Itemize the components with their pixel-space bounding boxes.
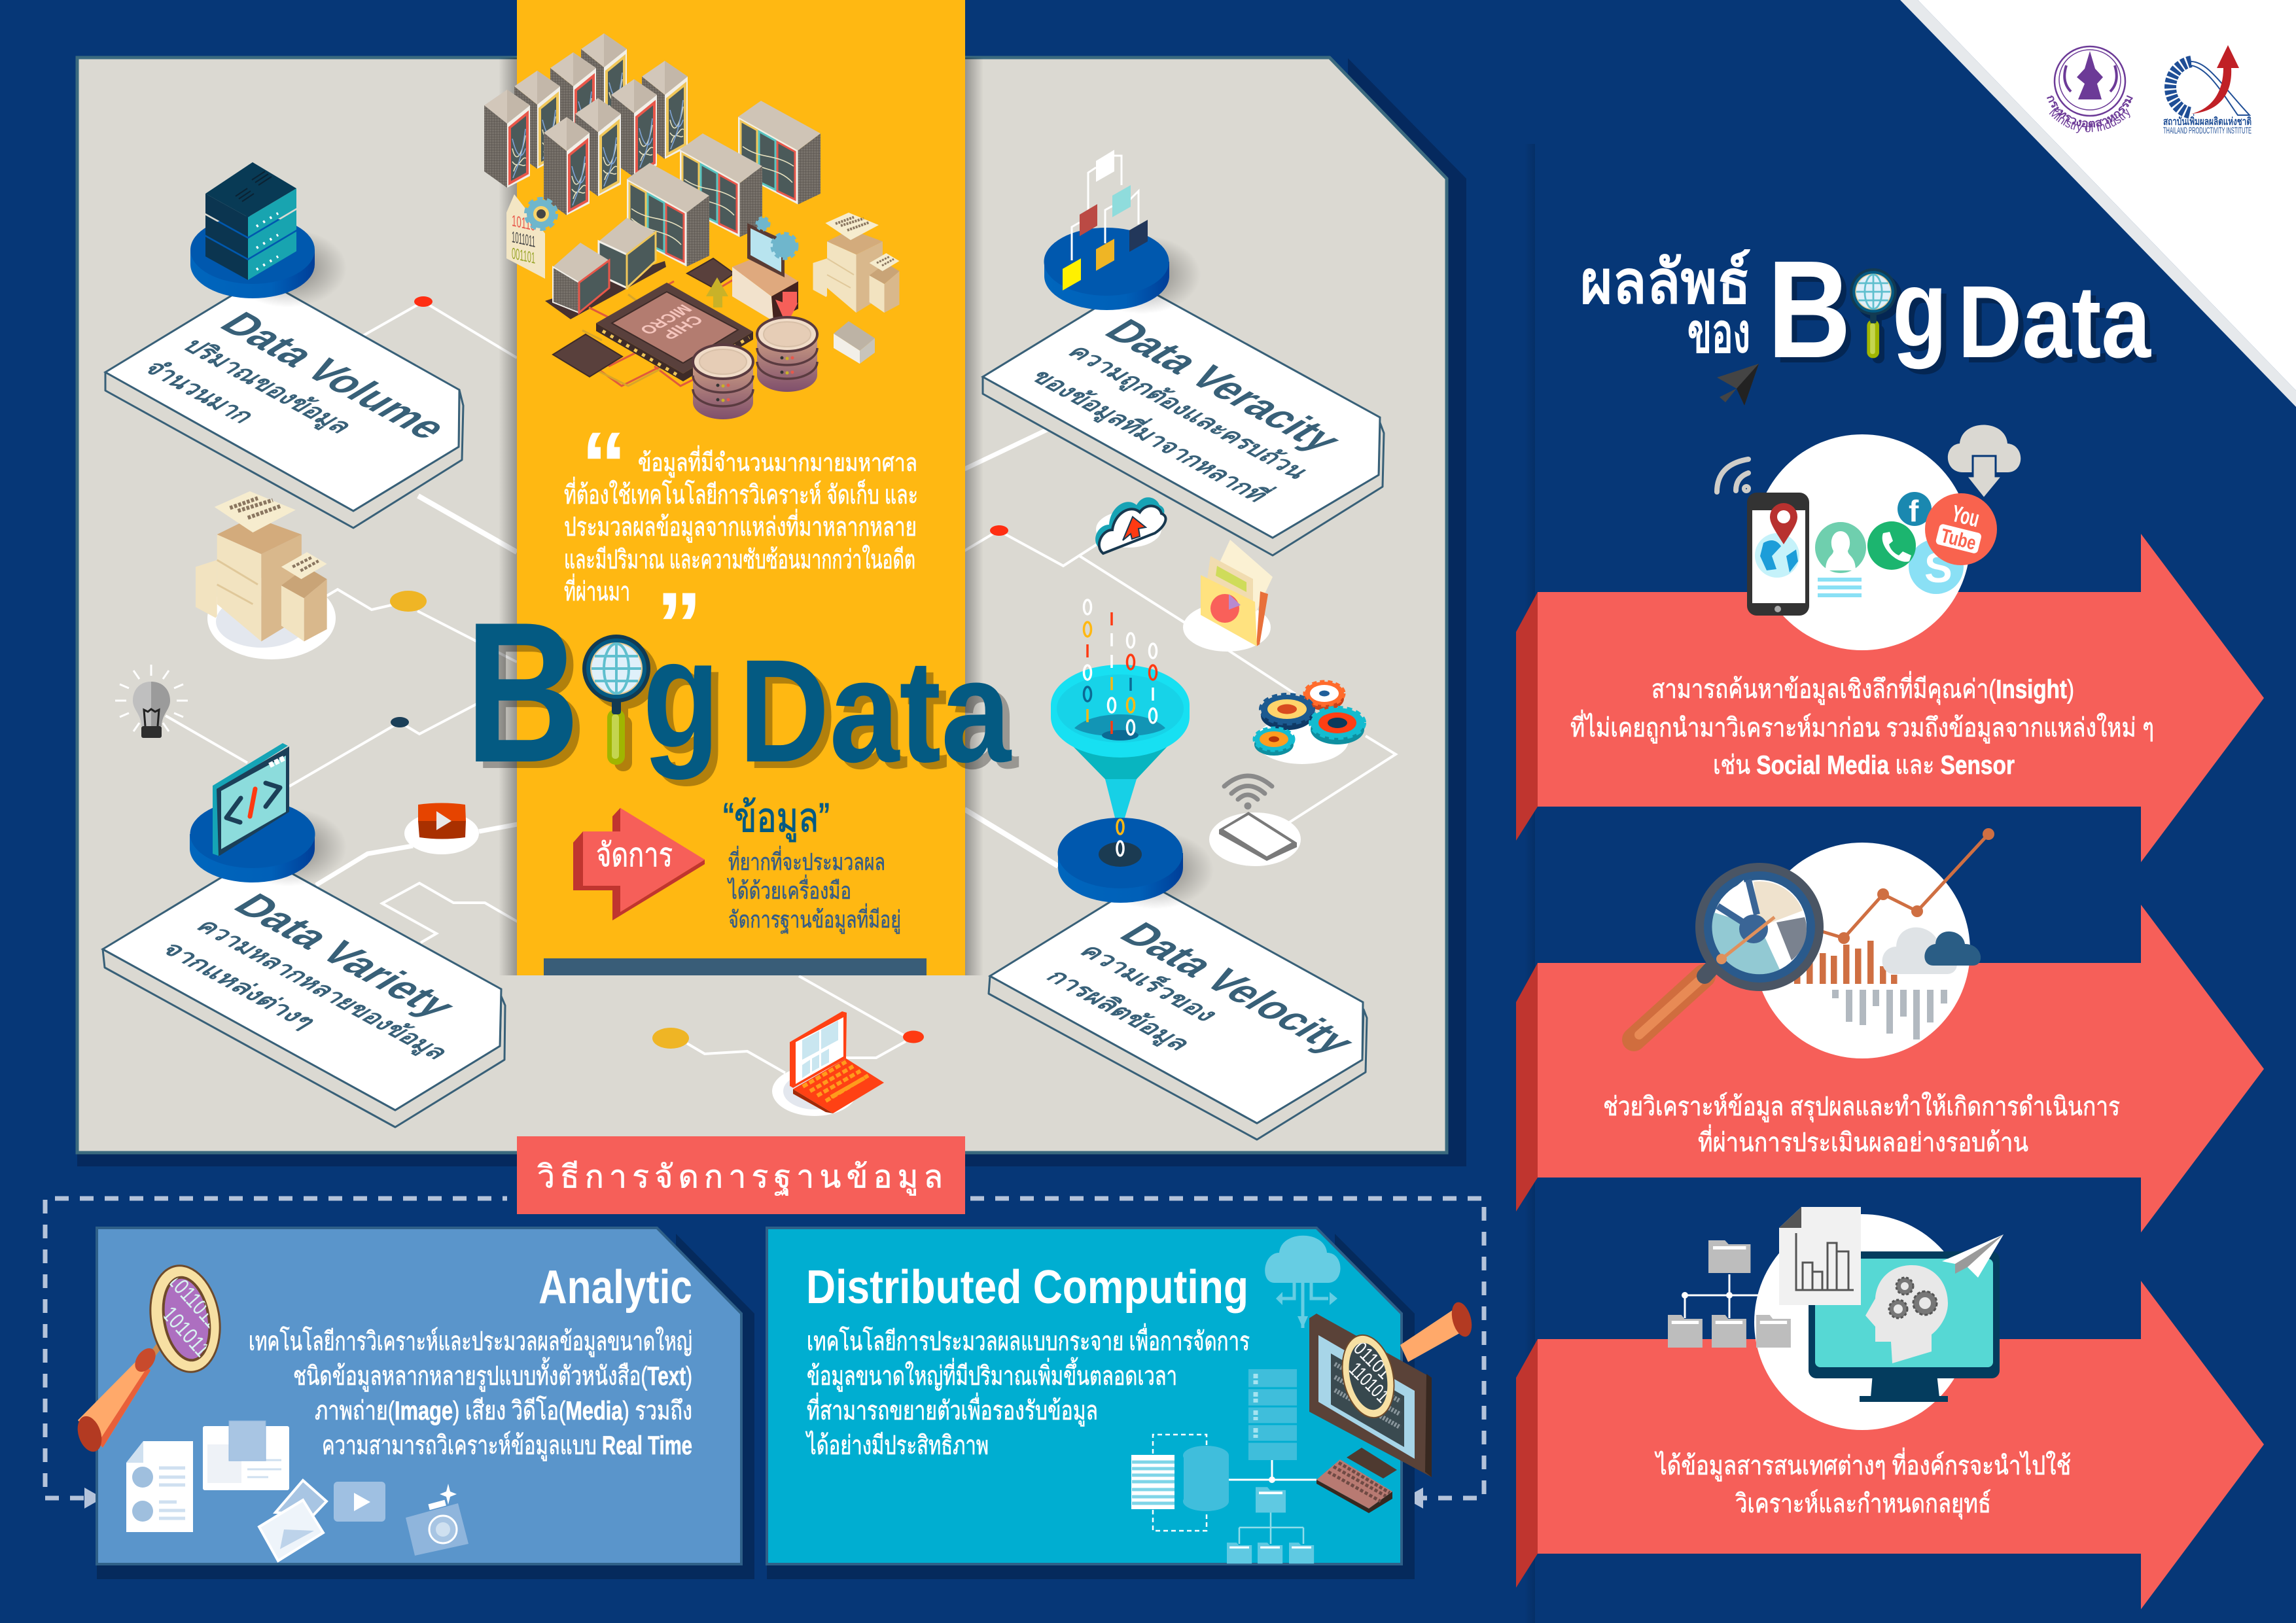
text: results: ผลลัพธ์ <box>1580 249 1751 316</box>
icon: tablet wifi <box>1209 776 1301 866</box>
logo: Ministry of Industry: กระทรวงอุตสาหกรรม <box>2047 96 2133 131</box>
icon: monitor <box>1309 1314 1432 1478</box>
letter B: B <box>1767 232 1851 387</box>
text: Variety description line 2: จากแหล่งต่างๆ <box>155 939 323 1032</box>
white circle <box>1754 843 1970 1058</box>
icon: magnifier <box>77 1265 221 1452</box>
heading: Analytic: Analytic <box>539 1261 692 1314</box>
chip: large: MICRO <box>635 302 697 338</box>
body line 4: ได้อย่างมีประสิทธิภาพ <box>805 1431 989 1460</box>
line 2: ได้ด้วยเครื่องมือ <box>727 875 851 904</box>
node: yellow dot <box>390 591 427 612</box>
icon: document stack <box>1131 1455 1174 1509</box>
shadow of results column <box>1525 144 1535 1623</box>
icon: cloud download <box>1948 425 2021 498</box>
banner: data management methods <box>517 1136 965 1214</box>
result arrow 3 <box>1516 1214 2264 1609</box>
icon: database <box>1183 1446 1229 1511</box>
node: red dot right <box>990 525 1008 536</box>
text: Tube: Tube <box>1939 525 1978 555</box>
text line 1: สามารถค้นหาข้อมูลเชิงลึกที่มีคุณค่า(Insight) <box>1651 671 2074 705</box>
arrow: dashed into Distributed <box>1404 1488 1423 1509</box>
top-right corner <box>1900 0 2296 407</box>
text line 3: เช่น Social Media และ Sensor <box>1713 751 2015 780</box>
icon: skype <box>1909 539 1964 594</box>
body line 2: ชนิดข้อมูลหลากหลายรูปแบบทั้งตัวหนังสือ(Text) <box>293 1357 692 1391</box>
database left <box>693 345 753 419</box>
body line 4: ความสามารถวิเคราะห์ข้อมูลแบบ Real Time <box>322 1431 692 1461</box>
icon: keyboard <box>1316 1459 1392 1513</box>
binary text on lens: 1011011 <box>162 1268 224 1333</box>
text: data difficult to process <box>723 795 901 934</box>
result arrow 1 <box>1516 434 2264 862</box>
icon: magnifier as letter i <box>1850 268 1897 358</box>
icon: paper plane <box>1942 1234 2004 1278</box>
icon: camera <box>406 1484 468 1556</box>
network connector <box>1229 1460 1316 1483</box>
box pile <box>813 213 899 313</box>
body line 1: เทคโนโลยีการประมวลผลแบบกระจาย เพื่อการจัดการ <box>807 1323 1250 1356</box>
node: red dot top <box>414 296 433 307</box>
label: Data Veracity <box>983 283 1384 555</box>
icon: server tower <box>1248 1369 1297 1460</box>
icon: clouds <box>1882 928 1981 974</box>
white circle <box>1754 1214 1970 1430</box>
label: Data Velocity <box>989 881 1367 1140</box>
quote line 3: ประมวลผลข้อมูลจากแหล่งที่มาหลากหลาย <box>564 509 917 542</box>
icon: video play <box>404 803 479 854</box>
chip: small right <box>687 258 734 288</box>
chart: analysis bars and line <box>1775 828 1994 1039</box>
arrow: manage <box>573 808 705 920</box>
icon: cloud upload <box>1095 497 1166 553</box>
icon: server stack on disc <box>190 162 347 307</box>
node: red dot bottom <box>903 1031 924 1043</box>
line 1: ที่ยากที่จะประมวลผล <box>728 846 885 875</box>
icon: magnifier over monitor <box>1341 1302 1472 1418</box>
text line 1: ได้ข้อมูลสารสนเทศต่างๆ ที่องค์กรจะนำไปใช้ <box>1655 1448 2071 1481</box>
disc under funnel <box>1057 818 1214 909</box>
binary sheet <box>506 194 545 279</box>
heading: Data Variety: Data Variety <box>223 887 468 1024</box>
icon: video <box>334 1482 385 1522</box>
icon: org chart on disc <box>1044 150 1201 314</box>
word Data: Data <box>739 629 1012 793</box>
word Data: Data <box>1958 265 2151 379</box>
circuit lines <box>166 302 1396 1073</box>
dashed frame around methods <box>45 1198 1484 1498</box>
terminal <box>732 218 798 321</box>
binary text on lens: 01101 <box>1349 1338 1395 1384</box>
icon: facebook <box>1898 492 1932 528</box>
text: Volume description line 1: ปริมาณของข้อมูล <box>175 334 360 438</box>
quote line 4: และมีปริมาณ และความซับซ้อนมากกว่าในอดีต <box>564 544 915 574</box>
white circle <box>1754 434 1970 650</box>
icon: youtube <box>1925 493 1997 565</box>
tall server racks <box>484 33 688 215</box>
node: yellow dot bottom <box>652 1028 689 1049</box>
binary sheet: 10110 <box>512 212 535 235</box>
label: Data Variety <box>103 855 505 1127</box>
icon: magnifier: 101011 <box>157 1302 215 1362</box>
text: You: You <box>1949 500 1982 532</box>
text: of: ของ <box>1687 302 1750 364</box>
heading: Data Velocity: Data Velocity <box>1109 916 1367 1060</box>
icon: magnifier as letter i <box>582 635 650 765</box>
arrow: dashed into Analytic <box>84 1488 103 1509</box>
node: dark dot <box>391 717 409 727</box>
text: Variety description line 1: ความหลากหลายของข้อมูล <box>189 916 455 1064</box>
panel: Distributed Computing <box>767 1228 1475 1579</box>
chip: large: CHIP <box>657 313 708 342</box>
arrow: red down <box>775 292 798 325</box>
icon: phone call <box>1867 521 1916 570</box>
icon: wifi <box>1717 459 1748 492</box>
icon: chart folder <box>1183 540 1273 652</box>
panel: isometric data management board <box>77 58 1466 1166</box>
text line 2: ที่ไม่เคยถูกนำมาวิเคราะห์มาก่อน รวมถึงข้อมูลจากแหล่งใหม่ ๆ <box>1570 710 2154 743</box>
icon: cloud <box>1265 1236 1341 1328</box>
text: Veracity description line 2: ของข้อมูลที่มาจากหลากที่ <box>1023 364 1279 506</box>
icon: browser window <box>203 1421 289 1490</box>
heading: Data Volume: Data Volume <box>209 305 459 445</box>
text: Veracity description line 1: ความถูกต้องและครบถ้วน <box>1061 341 1315 483</box>
panel: Analytic <box>73 1228 754 1579</box>
body line 3: ภาพถ่าย(Image) เสียง วิดีโอ(Media) รวมถึง <box>315 1396 692 1425</box>
icon: report page <box>126 1441 193 1532</box>
body line 1: เทคโนโลยีการวิเคราะห์และประมวลผลข้อมูลขนาดใหญ่ <box>249 1326 692 1357</box>
logo: Ministry of Industry <box>2047 46 2133 133</box>
arrow: olive up <box>706 277 728 307</box>
logo: Ministry of Industry: Ministry of Industry <box>2049 108 2130 133</box>
text line 2: วิเคราะห์และกำหนดกลยุทธ์ <box>1735 1489 1991 1520</box>
binary sheet: 001101 <box>512 245 535 268</box>
icon: contact profile <box>1815 522 1866 595</box>
logo: Thailand Productivity Institute: สถาบันเพิ่มผลผลิตแห่งชาติ <box>2163 114 2252 128</box>
quote mark close: ” <box>656 573 702 676</box>
letter B: B <box>465 580 580 804</box>
heading: results of Big Data <box>1580 232 2151 406</box>
icon: pile of paper boxes <box>196 491 336 659</box>
wide server racks <box>627 101 821 267</box>
quote mark open: “ <box>581 413 627 515</box>
icon: phone with map pin <box>1747 493 1809 616</box>
wordmark Big Data <box>1767 232 2151 387</box>
text: Volume description line 2: จำนวนมาก <box>137 357 262 427</box>
illustration: data centre <box>484 33 899 419</box>
gear: left <box>527 200 556 228</box>
logo: Thailand Productivity Institute <box>2163 45 2252 135</box>
icon: facebook: f <box>1909 494 1919 528</box>
icon: gears <box>1254 682 1364 764</box>
chip: small left <box>553 334 622 377</box>
icon: monitor with thinking head <box>1809 1251 2000 1402</box>
text line 1: ช่วยวิเคราะห์ข้อมูล สรุปผลและทำให้เกิดการดำเนินการ <box>1603 1091 2120 1123</box>
quote line 5: ที่ผ่านมา <box>564 574 630 606</box>
banner text: วิธีการจัดการฐานข้อมูล <box>537 1160 948 1196</box>
text: Velocity description line 2: การผลิตข้อมูล <box>1039 966 1197 1055</box>
quote text <box>564 413 918 676</box>
letter g: g <box>643 608 720 780</box>
text: Velocity description line 1: ความเร็วของ <box>1073 939 1227 1025</box>
icon: magnifier over monitor: 110101 <box>1345 1359 1393 1407</box>
folder network <box>1668 1240 1791 1348</box>
line 3: จัดการฐานข้อมูลที่มีอยู่ <box>728 903 901 934</box>
panel: yellow centre band <box>499 0 983 975</box>
icon: laptop <box>772 1011 884 1116</box>
icon: document with chart <box>1779 1207 1861 1305</box>
icon: photos <box>259 1480 327 1561</box>
quote line 1: ข้อมูลที่มีจำนวนมากมายมหาศาล <box>638 445 917 478</box>
platform and wires <box>545 261 752 386</box>
icon: skype: S <box>1924 544 1952 591</box>
title: Big Data <box>465 580 1012 804</box>
binary digits <box>1084 600 1157 735</box>
chip: large <box>596 283 753 381</box>
result arrow 2 <box>1516 843 2264 1232</box>
icon: magnifier with pie chart <box>1634 863 1824 1039</box>
folder tree <box>1227 1487 1314 1563</box>
letter g: g <box>1892 248 1947 370</box>
body line 2: ข้อมูลขนาดใหญ่ที่มีปริมาณเพิ่มขึ้นตลอดเวลา <box>807 1357 1177 1391</box>
heading: Distributed Computing: Distributed Computing <box>806 1261 1248 1314</box>
body line 3: ที่สามารถขยายตัวเพื่อรองรับข้อมูล <box>807 1393 1098 1426</box>
funnel with falling binary digits <box>1051 600 1190 818</box>
icon: cursor <box>1717 364 1759 406</box>
text line 2: ที่ผ่านการประเมินผลอย่างรอบด้าน <box>1698 1125 2028 1157</box>
dashed exchange lines <box>1153 1435 1207 1531</box>
quote line 2: ที่ต้องใช้เทคโนโลยีการวิเคราะห์ จัดเก็บ และ <box>564 477 918 510</box>
label: Data Volume <box>105 278 463 528</box>
text: manage: จัดการ <box>596 837 673 873</box>
heading: Data Veracity: Data Veracity <box>1094 313 1353 458</box>
short racks <box>553 218 656 313</box>
heading: data: “ข้อมูล” <box>723 795 830 842</box>
icon: code window on disc <box>190 743 347 886</box>
binary sheet: 1011011 <box>512 228 535 251</box>
small grey box <box>834 321 875 364</box>
icon: light bulb <box>115 665 188 738</box>
database right <box>757 317 817 392</box>
